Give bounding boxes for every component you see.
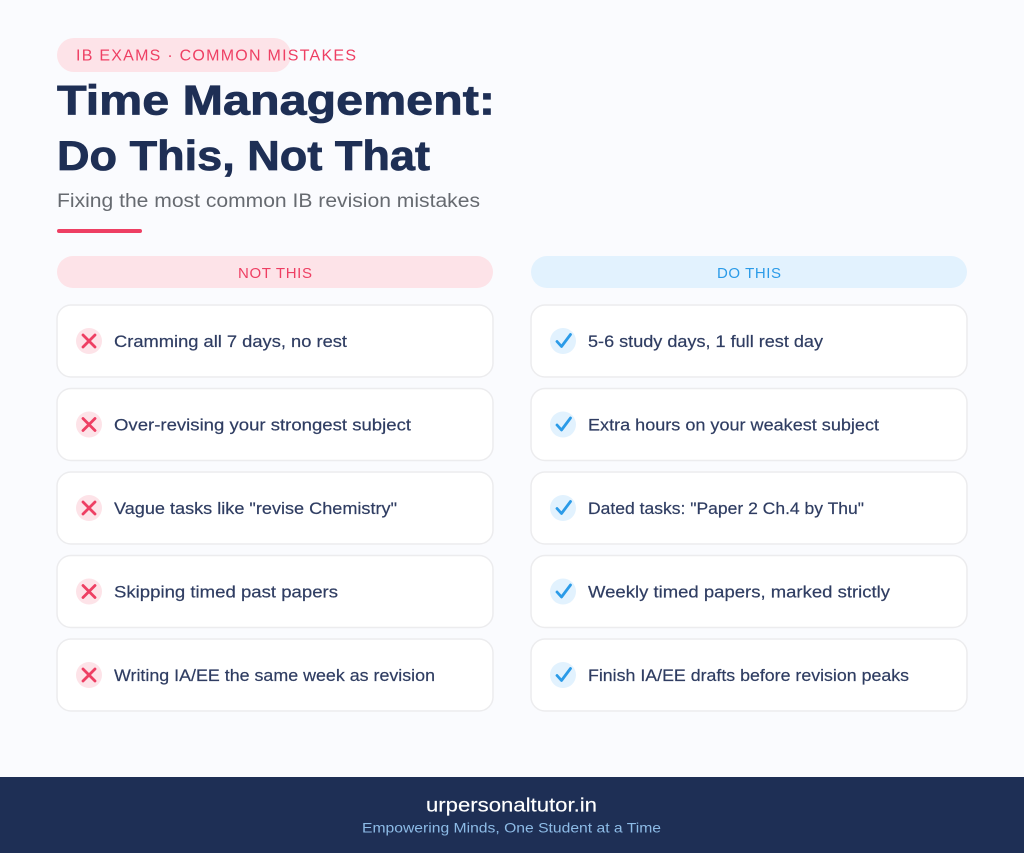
card: over-revising [57, 388, 493, 460]
title: Do This, Not That [57, 132, 430, 179]
card: dated tasks: Dated tasks: "Paper 2 Ch.4 by Thu" [588, 499, 864, 518]
card: study days [531, 305, 967, 377]
panel: do this [531, 256, 967, 711]
card: dated tasks [531, 472, 967, 544]
card: finish drafts: Finish IA/EE drafts before revision peaks [588, 666, 909, 685]
title [57, 76, 495, 179]
header: do this [531, 256, 967, 288]
card: study days: 5-6 study days, 1 full rest day [588, 332, 824, 351]
card: weekly papers [531, 556, 967, 628]
accent underline [57, 229, 142, 233]
title: Time Management: [57, 76, 495, 124]
header: not this [57, 256, 493, 288]
footer brand: urpersonaltutor.in [426, 796, 597, 816]
eyebrow tag [57, 38, 356, 72]
eyebrow tag: IB EXAMS · COMMON MISTAKES [76, 48, 356, 64]
card: finish drafts [531, 639, 967, 711]
card: cramming: Cramming all 7 days, no rest [114, 332, 347, 351]
card: vague tasks: Vague tasks like "revise Chemistry" [114, 499, 397, 518]
card: vague tasks [57, 472, 493, 544]
card: skipping papers: Skipping timed past papers [114, 582, 338, 602]
card: weakest subject [531, 388, 967, 460]
header: do this: DO THIS [717, 265, 781, 282]
card: skipping papers [57, 556, 493, 628]
card: writing IA/EE: Writing IA/EE the same week as revision [114, 666, 435, 685]
card: over-revising: Over-revising your strongest subject [114, 416, 411, 434]
card: cramming [57, 305, 493, 377]
footer [0, 777, 1024, 853]
header: not this: NOT THIS [238, 265, 312, 282]
subtitle: Fixing the most common IB revision mistakes [57, 191, 480, 212]
card: writing IA/EE [57, 639, 493, 711]
panel: not this [57, 256, 493, 711]
card: weakest subject: Extra hours on your weakest subject [588, 416, 879, 434]
footer tagline: Empowering Minds, One Student at a Time [362, 820, 661, 836]
card: weekly papers: Weekly timed papers, marked strictly [588, 582, 891, 602]
